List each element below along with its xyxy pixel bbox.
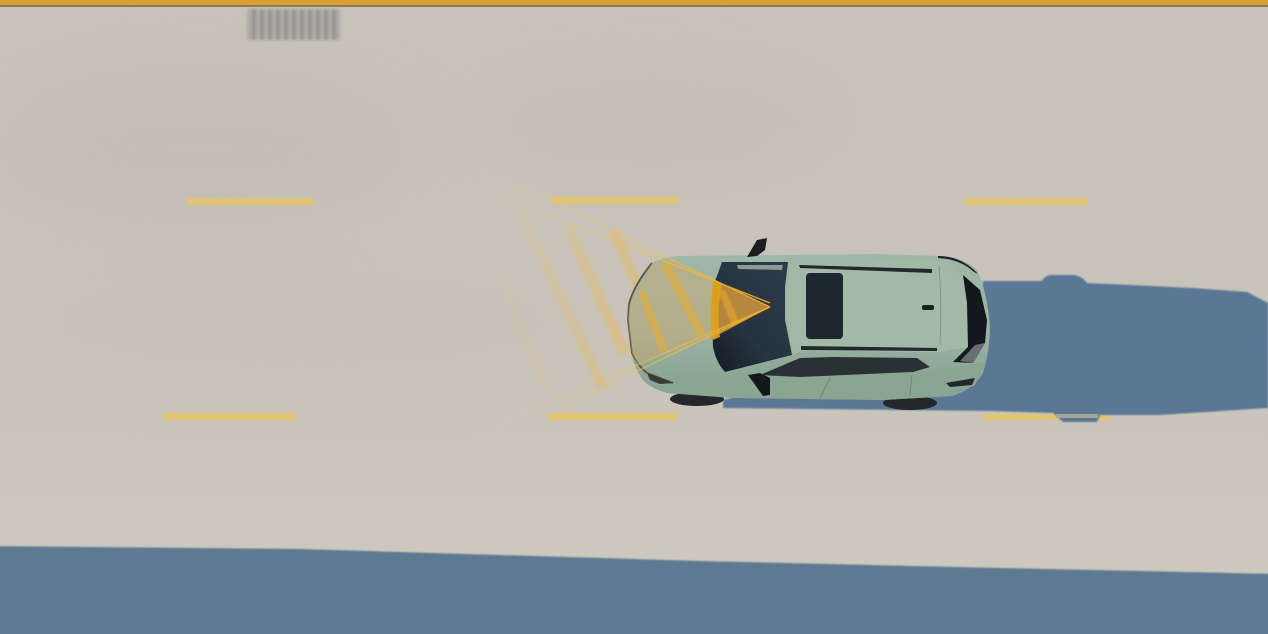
rear window: [953, 275, 987, 363]
rear and door lines: [820, 375, 912, 398]
building shadow at bottom of road: [0, 546, 1268, 634]
rear hatch line: [939, 266, 941, 345]
windshield sun strip: [737, 265, 783, 270]
side windows: [760, 357, 930, 377]
tail light: [946, 378, 975, 387]
cone fill over hood: [628, 260, 713, 364]
stripes in cone: [638, 262, 739, 352]
car body: [628, 254, 990, 400]
lane dashes: lower row: [163, 413, 1110, 420]
car: [628, 238, 990, 410]
roof rail: upper: [799, 265, 932, 273]
front light: [647, 373, 674, 384]
cone fill near camera: [711, 279, 770, 339]
rear window reflection: [960, 343, 985, 363]
curb: yellow line at top of road: [0, 0, 1268, 7]
grey patch in the shadow bump: [1056, 414, 1098, 418]
wing mirror: side: [748, 373, 770, 396]
wing mirror: top: [747, 238, 767, 257]
lower door panel shading: [650, 362, 985, 400]
windshield: [712, 262, 792, 372]
rear top spoiler: [938, 256, 978, 274]
storm drain grate: [247, 9, 340, 40]
cone edges lower: [500, 307, 770, 425]
wheels and tyres: [670, 392, 937, 410]
amber edge behind windshield: [711, 280, 722, 340]
roof rail: lower: [801, 346, 937, 351]
sunroof: [806, 273, 843, 339]
hood outline: [628, 263, 673, 383]
roof panel: [787, 260, 968, 355]
roof antenna: [922, 305, 934, 310]
lane dashes: upper row: [187, 197, 1088, 205]
cone edges upper: [465, 178, 770, 307]
camera view cone: [465, 178, 770, 425]
camera view stripes on road: [498, 208, 642, 390]
shadow of car: [723, 275, 1268, 422]
